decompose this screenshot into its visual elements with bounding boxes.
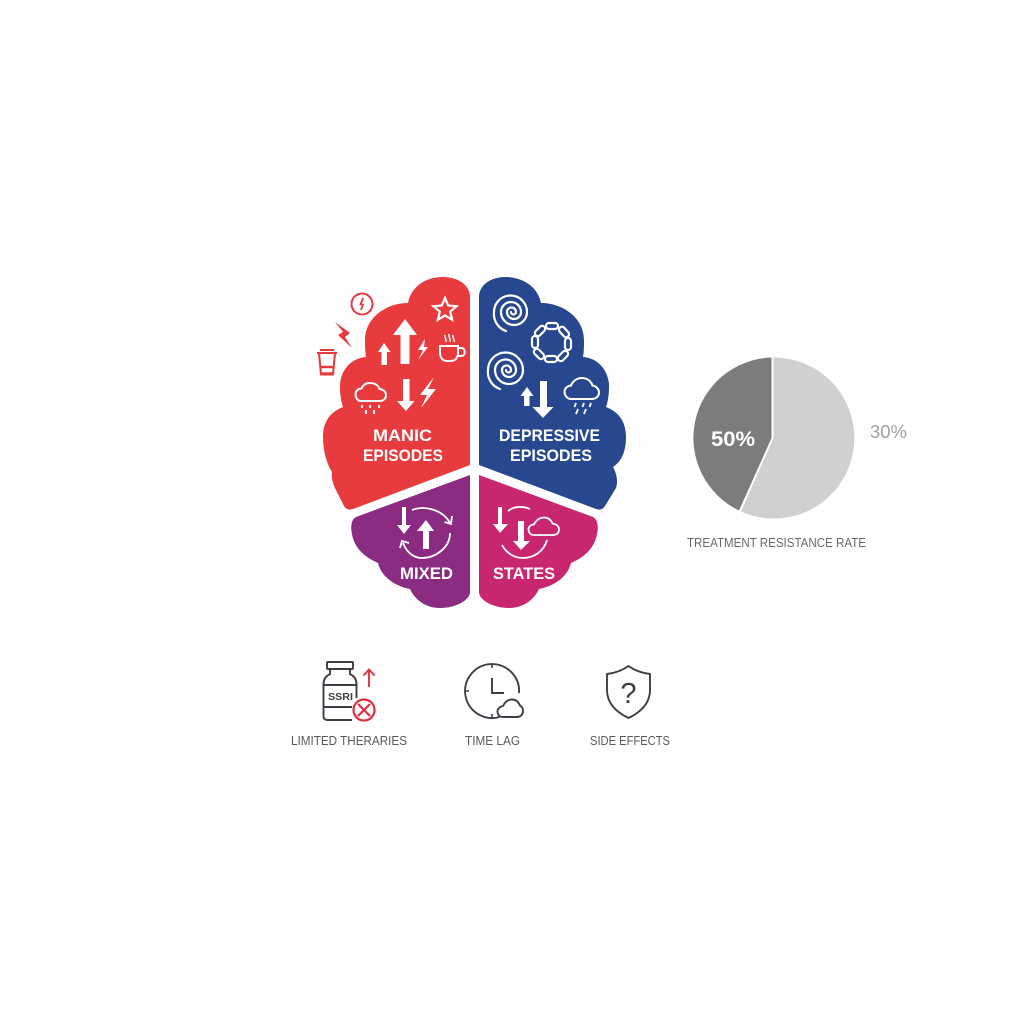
label: side effects: SIDE EFFECTS <box>590 734 670 748</box>
panel: depressive episodes lobe <box>479 277 626 510</box>
label: manic episodes: MANIC <box>373 426 432 445</box>
icon: white star <box>434 298 456 320</box>
icon: large down arrow <box>532 381 554 418</box>
value: 30%: 30% <box>870 422 907 442</box>
icon: large up arrow <box>393 319 417 364</box>
icon: SSRI bottle with cross and arrow: SSRI <box>328 691 353 703</box>
icon: coffee mug with steam <box>440 334 465 361</box>
icon: small white bolt <box>418 339 428 360</box>
icon: down arrow <box>397 379 414 411</box>
icon: lower spiral <box>488 352 523 389</box>
label: limited theraries: LIMITED THERARIES <box>291 734 407 748</box>
label: mixed: MIXED <box>400 564 453 583</box>
icon: red lightning bolt <box>335 322 352 348</box>
panel: states lobe <box>479 475 598 608</box>
icon: red circled bolt <box>352 294 372 314</box>
label: depressive episodes <box>499 426 600 465</box>
label: manic episodes: EPISODES <box>363 446 443 465</box>
icon: red coffee cup <box>317 350 337 374</box>
icon: small up arrow <box>378 343 390 365</box>
icon: mixed arrows cycle <box>397 507 452 558</box>
icon: shield with question mark <box>607 666 650 718</box>
pie slice: dark segment <box>693 358 772 510</box>
icon: rain cloud <box>564 378 599 414</box>
icon: states arrows and cloud <box>493 507 559 558</box>
icon: shield with question mark: ? <box>620 678 637 710</box>
icon: clock with cloud <box>465 664 523 718</box>
caption: treatment resistance rate: TREATMENT RESISTANCE RATE <box>687 536 866 550</box>
label: states: STATES <box>493 564 555 583</box>
panel: manic episodes lobe <box>323 277 470 510</box>
panel: mixed lobe <box>351 475 470 608</box>
label: depressive episodes: EPISODES <box>510 446 592 465</box>
icon: rain cloud <box>356 383 386 414</box>
icon: small up arrow <box>520 387 534 406</box>
label: manic episodes <box>363 426 443 465</box>
label: time lag: TIME LAG <box>465 734 520 748</box>
pie slice: light segment <box>741 357 854 518</box>
pie chart: treatment resistance rate <box>687 357 907 550</box>
label: depressive episodes: DEPRESSIVE <box>499 426 600 445</box>
icon: large white bolt <box>420 377 436 408</box>
icon: upper spiral <box>494 296 527 331</box>
icon: SSRI bottle with cross and arrow <box>324 662 374 720</box>
icon: chain ring <box>532 323 571 362</box>
brain diagram <box>317 277 626 608</box>
value: 50%: 50% <box>711 428 755 451</box>
